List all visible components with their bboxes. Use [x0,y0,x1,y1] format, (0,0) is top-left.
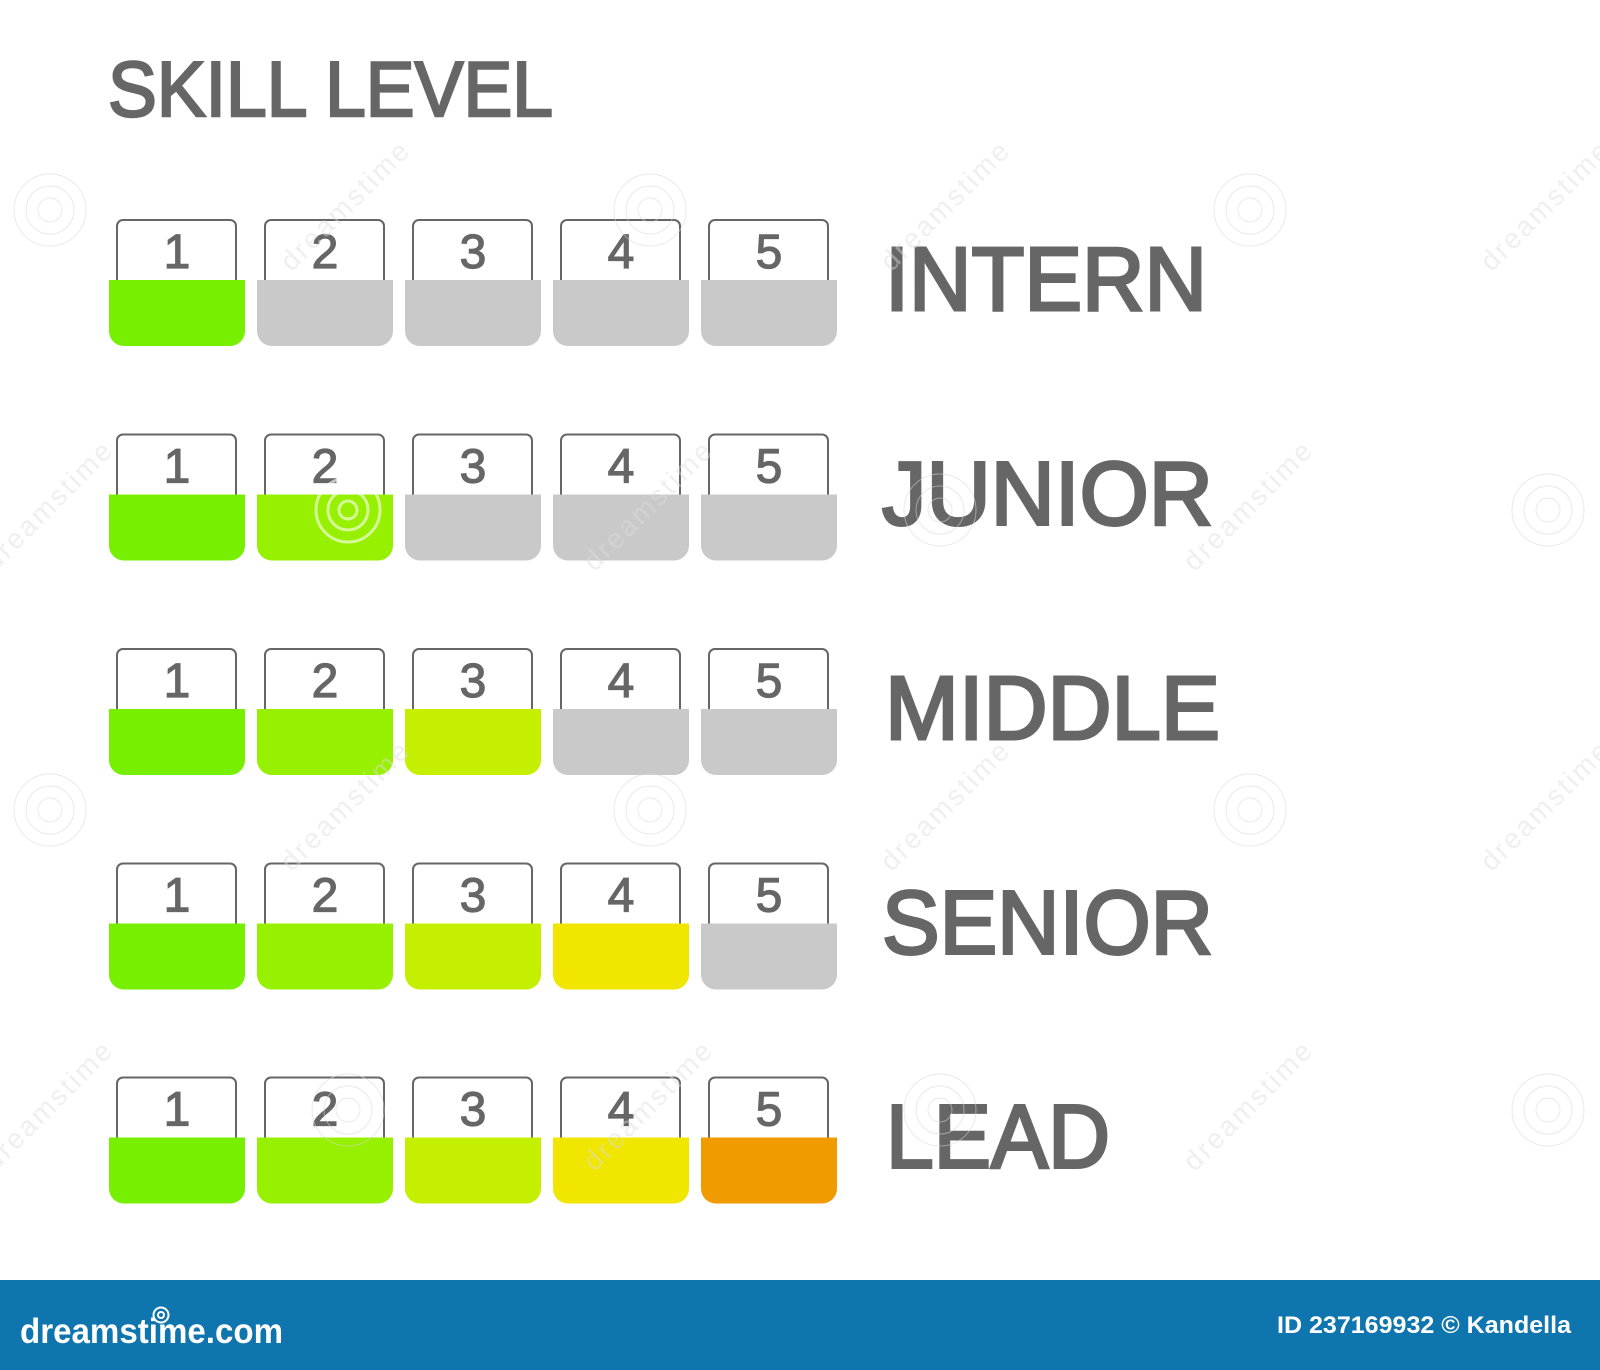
watermark pattern: dreamstime [1177,434,1320,577]
cell 1 active: 1 [164,1084,190,1136]
cell 3 active [405,864,541,990]
cell 5 inactive: 5 [756,440,782,494]
row: middle [109,649,1220,775]
watermark pattern: dreamstime [274,134,417,277]
cell 4 inactive: 4 [608,655,634,708]
cell 4 inactive [553,649,689,775]
cell 5 inactive [701,864,837,990]
cell 4 inactive [553,220,689,346]
cell 2 active: 2 [312,655,338,708]
watermark pattern: dreamstime [874,734,1017,877]
watermark pattern [0,134,1600,1177]
cell 4 inactive: 4 [608,440,634,494]
footer bar [0,1280,1600,1370]
cell 3 active: 3 [460,655,486,708]
label: lead: LEAD [886,1088,1110,1188]
cell 5 inactive: 5 [756,870,782,922]
cell 5 active [701,1078,837,1204]
cell 2 active: 2 [312,1084,338,1136]
cell 4 active [553,864,689,990]
cell 5 active: 5 [756,1084,782,1136]
cell 5 inactive: 5 [756,226,782,279]
watermark pattern: dreamstime [274,734,417,877]
cell 3 inactive [405,220,541,346]
cell 1 active: 1 [164,440,190,494]
watermark pattern: dreamstime [577,1034,720,1177]
cell 4 active [553,1078,689,1204]
cell 3 active: 3 [460,1084,486,1136]
icon: spiral [154,1308,168,1322]
cell 5 inactive [701,434,837,560]
watermark pattern: dreamstime [874,134,1017,277]
cell 2 active [257,434,393,560]
cell 5 inactive: 5 [756,655,782,708]
cell 2 active: 2 [312,440,338,494]
cell 5 inactive [701,220,837,346]
footer credit: ID 237169932 © Kandella [1277,1312,1572,1339]
row: intern [109,220,1207,346]
row: junior [109,434,1213,560]
cell 2 active [257,1078,393,1204]
cell 3 inactive: 3 [460,226,486,279]
cell 2 active: 2 [312,870,338,922]
cell 1 active: 1 [164,870,190,922]
cell 2 active [257,864,393,990]
cell 1 active [109,1078,245,1204]
cell 1 active [109,434,245,560]
label: senior: SENIOR [882,874,1213,974]
cell 1 active: 1 [164,226,190,279]
cell 1 active [109,649,245,775]
cell 1 active [109,220,245,346]
cell 3 active: 3 [460,870,486,922]
cell 3 active [405,649,541,775]
cell 2 inactive [257,220,393,346]
cell 4 inactive [553,434,689,560]
watermark pattern: dreamstime [577,434,720,577]
title: SKILL LEVEL [108,45,553,133]
row: senior [109,864,1213,990]
cell 4 active: 4 [608,1084,634,1136]
row: lead [109,1078,1110,1204]
cell 2 inactive: 2 [312,226,338,279]
cell 1 active [109,864,245,990]
cell 4 inactive: 4 [608,226,634,279]
cell 2 active [257,649,393,775]
label: junior: JUNIOR [882,444,1213,544]
label: intern: INTERN [885,230,1207,330]
footer logo text: dreamstime.com [20,1312,283,1351]
cell 4 active: 4 [608,870,634,922]
cell 1 active: 1 [164,655,190,708]
cell 5 inactive [701,649,837,775]
label: middle: MIDDLE [885,659,1220,759]
cell 3 active [405,1078,541,1204]
cell 3 inactive: 3 [460,440,486,494]
watermark pattern: dreamstime [1177,1034,1320,1177]
cell 3 inactive [405,434,541,560]
